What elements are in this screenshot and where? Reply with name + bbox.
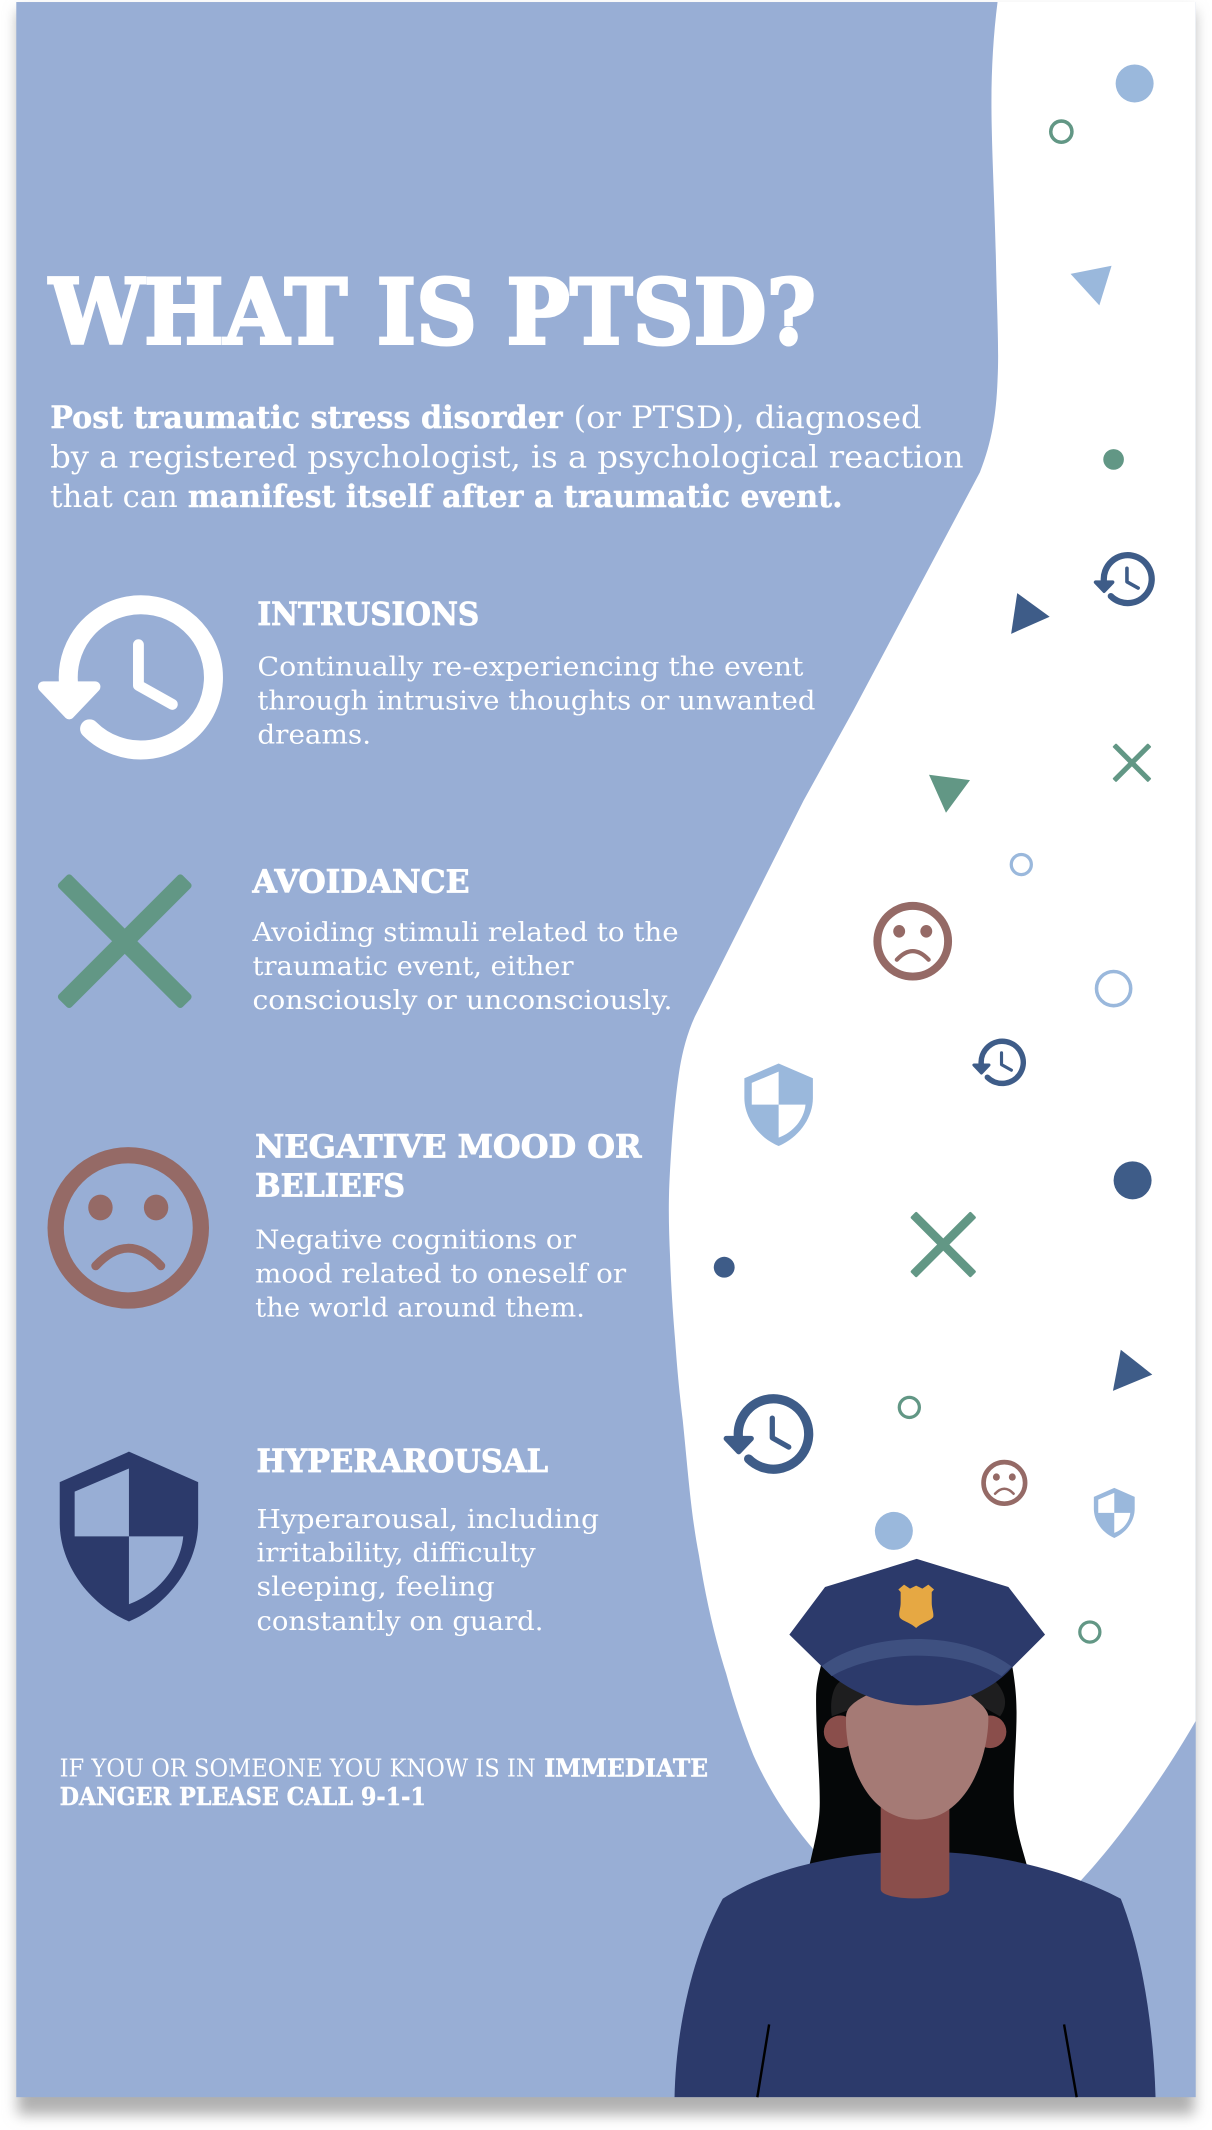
illustration: police officer: [675, 1559, 1156, 2097]
icon: small sad face lower: [984, 1462, 1025, 1504]
uniform body: [675, 1853, 1156, 2097]
icon: large clock: [43, 605, 213, 750]
intro paragraph: manifest itself after a traumatic event.: [188, 479, 843, 515]
face: [846, 1691, 988, 1820]
cap band: [822, 1639, 1012, 1676]
section: negative mood or beliefs: the world around them.: [255, 1294, 585, 1324]
neck: [881, 1792, 949, 1898]
icon: small clock top: [1096, 555, 1152, 603]
section: intrusions: INTRUSIONS: [257, 595, 479, 633]
section: avoidance: traumatic event, either: [252, 952, 574, 982]
intro paragraph: [50, 400, 964, 515]
section: hyperarousal: [257, 1442, 599, 1637]
icon: small clock middle: [974, 1041, 1023, 1083]
cap badge: [898, 1585, 934, 1628]
decorative floating shapes: [714, 64, 1154, 1642]
icon: small shield lower: [1094, 1488, 1135, 1538]
section: negative mood or beliefs: mood related to oneself or: [255, 1260, 627, 1290]
uniform seams: [757, 2024, 1077, 2097]
emergency note: [60, 1753, 708, 1811]
section: intrusions: through intrusive thoughts or unwanted: [257, 686, 815, 716]
icon: small x top: [1112, 743, 1151, 782]
intro paragraph: that can: [50, 479, 178, 515]
white curved area: [669, 2, 1196, 1927]
section: avoidance: consciously or unconsciously.: [252, 986, 673, 1016]
section: hyperarousal: irritability, difficulty: [257, 1539, 536, 1569]
section: avoidance: Avoiding stimuli related to the: [251, 918, 679, 948]
section: hyperarousal: sleeping, feeling: [257, 1573, 495, 1603]
title: WHAT IS PTSD?: [48, 260, 816, 366]
icon: medium x: [910, 1211, 976, 1278]
section: hyperarousal: constantly on guard.: [257, 1607, 543, 1637]
section: intrusions: dreams.: [257, 721, 371, 751]
emergency note: IMMEDIATE: [544, 1753, 708, 1782]
icon: large shield: [60, 1452, 198, 1621]
hair: [808, 1663, 1028, 1870]
section: intrusions: Continually re-experiencing the event: [257, 652, 804, 682]
section: avoidance: AVOIDANCE: [251, 862, 470, 900]
section: negative mood or beliefs: [255, 1127, 642, 1324]
section: negative mood or beliefs: Negative cognitions or: [255, 1226, 576, 1256]
icon: large x: [57, 873, 193, 1009]
section: negative mood or beliefs: BELIEFS: [255, 1167, 405, 1205]
section: hyperarousal: HYPERAROUSAL: [257, 1442, 548, 1480]
icon: small sad face upper: [877, 906, 948, 977]
icon: medium clock: [726, 1399, 809, 1469]
intro paragraph: (or PTSD), diagnosed: [574, 400, 922, 436]
ears: [824, 1716, 1006, 1748]
intro paragraph: Post traumatic stress disorder: [50, 400, 563, 436]
icon: large sad face: [56, 1155, 201, 1300]
intro paragraph: by a registered psychologist, is a psychological reaction: [50, 439, 964, 475]
section: avoidance: [251, 862, 679, 1016]
section: hyperarousal: Hyperarousal, including: [257, 1505, 599, 1535]
section: negative mood or beliefs: NEGATIVE MOOD OR: [255, 1127, 642, 1165]
hair highlights: [831, 1676, 1005, 1716]
icon: small shield upper: [744, 1063, 813, 1146]
section: intrusions: [257, 595, 815, 751]
cap: [789, 1559, 1045, 1705]
emergency note: DANGER PLEASE CALL 9-1-1: [60, 1782, 426, 1811]
emergency note: IF YOU OR SOMEONE YOU KNOW IS IN: [60, 1754, 536, 1782]
